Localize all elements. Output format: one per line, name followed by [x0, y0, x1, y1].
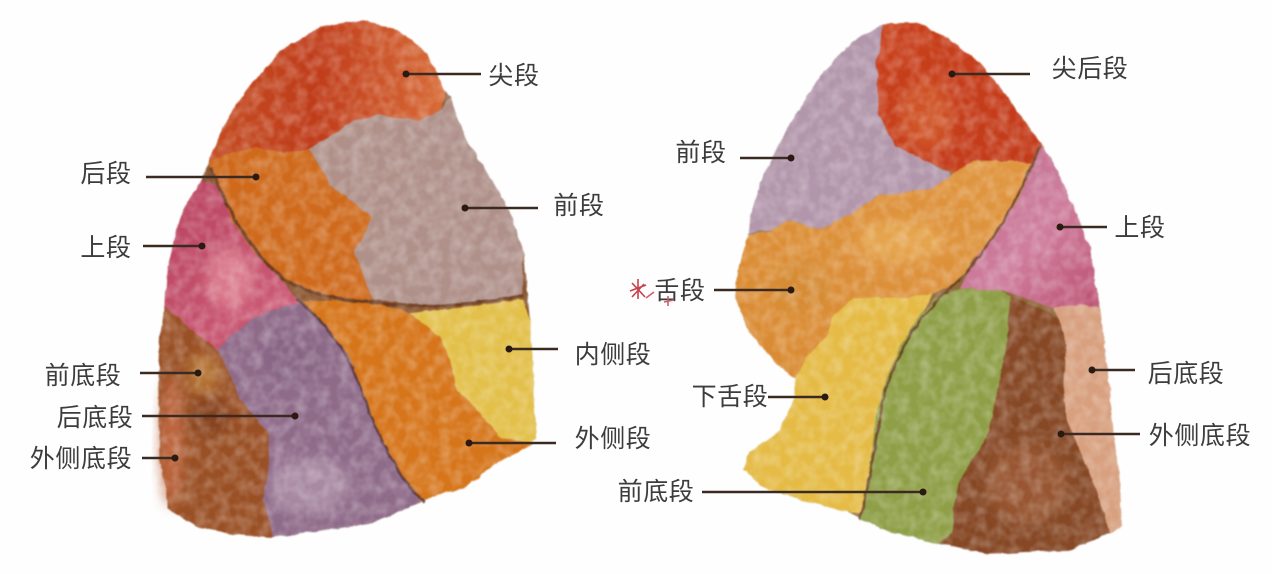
label: 后段 — [80, 160, 260, 188]
label: 前段 (left) — [462, 192, 605, 220]
label: 前底段 (right): 前底段 — [618, 478, 694, 506]
label: 上段 (left) — [80, 234, 206, 262]
fissure lines — [748, 147, 1040, 519]
posterior basal segment — [1053, 305, 1122, 533]
lateral segment — [303, 301, 533, 502]
anterior basal segment — [860, 289, 1010, 543]
label: 前底段 (right) — [618, 478, 926, 506]
fissure lines — [212, 168, 523, 502]
label: 后底段 (left): 后底段 — [57, 404, 133, 432]
label: 内侧段: 内侧段 — [575, 341, 651, 369]
label: 外侧底段 (right) — [1058, 422, 1251, 450]
apicoposterior segment — [877, 22, 1042, 173]
label: 前段 (right): 前段 — [675, 139, 727, 167]
right lung silhouette — [735, 22, 1122, 554]
label: 后底段 (right): 后底段 — [1148, 360, 1224, 388]
apical segment — [208, 20, 445, 162]
label: 下舌段 — [692, 383, 828, 411]
label: 尖段: 尖段 — [488, 62, 540, 90]
superior segment — [165, 180, 300, 351]
label: 舌段 — [654, 277, 794, 305]
label: 前底段 (left) — [45, 362, 202, 390]
label: 外侧底段: 外侧底段 — [30, 445, 132, 473]
red scribble mark — [630, 279, 674, 306]
posterior segment — [208, 148, 373, 300]
superior segment — [960, 145, 1100, 308]
label: 前底段 (left): 前底段 — [45, 362, 121, 390]
anterior segment — [308, 96, 523, 306]
label: 内侧段 — [506, 341, 651, 369]
label: 外侧底段 — [30, 445, 178, 473]
label: 外侧段: 外侧段 — [575, 425, 651, 453]
label: 舌段: 舌段 — [654, 277, 706, 305]
shading blobs — [773, 80, 1067, 522]
label: 后底段 (right) — [1088, 360, 1224, 388]
label: 尖段 — [402, 62, 540, 90]
label: 尖后段: 尖后段 — [1052, 55, 1128, 83]
left lung silhouette — [158, 20, 537, 537]
shading blobs — [161, 248, 350, 513]
right lung — [735, 22, 1122, 554]
basal brown segments — [158, 306, 273, 537]
anterior segment — [748, 24, 950, 234]
label: 后底段 (left) — [57, 404, 298, 432]
left lung — [158, 20, 537, 537]
label: 外侧段 — [466, 425, 651, 453]
label: 下舌段: 下舌段 — [692, 383, 768, 411]
label: 后段: 后段 — [80, 160, 132, 188]
posterior basal segment — [218, 303, 420, 537]
label: 外侧底段 (right): 外侧底段 — [1149, 422, 1251, 450]
label: 上段 (right) — [1056, 214, 1166, 242]
label: 上段 (right): 上段 — [1114, 214, 1166, 242]
inferior lingular segment — [743, 294, 933, 515]
lateral basal segment — [940, 298, 1110, 554]
label: 尖后段 — [948, 55, 1128, 83]
superior lingular segment — [735, 161, 1033, 378]
medial segment — [410, 299, 537, 444]
label: 前段 (left): 前段 — [553, 192, 605, 220]
label: 上段 (left): 上段 — [80, 234, 132, 262]
label: 前段 (right) — [675, 139, 794, 167]
